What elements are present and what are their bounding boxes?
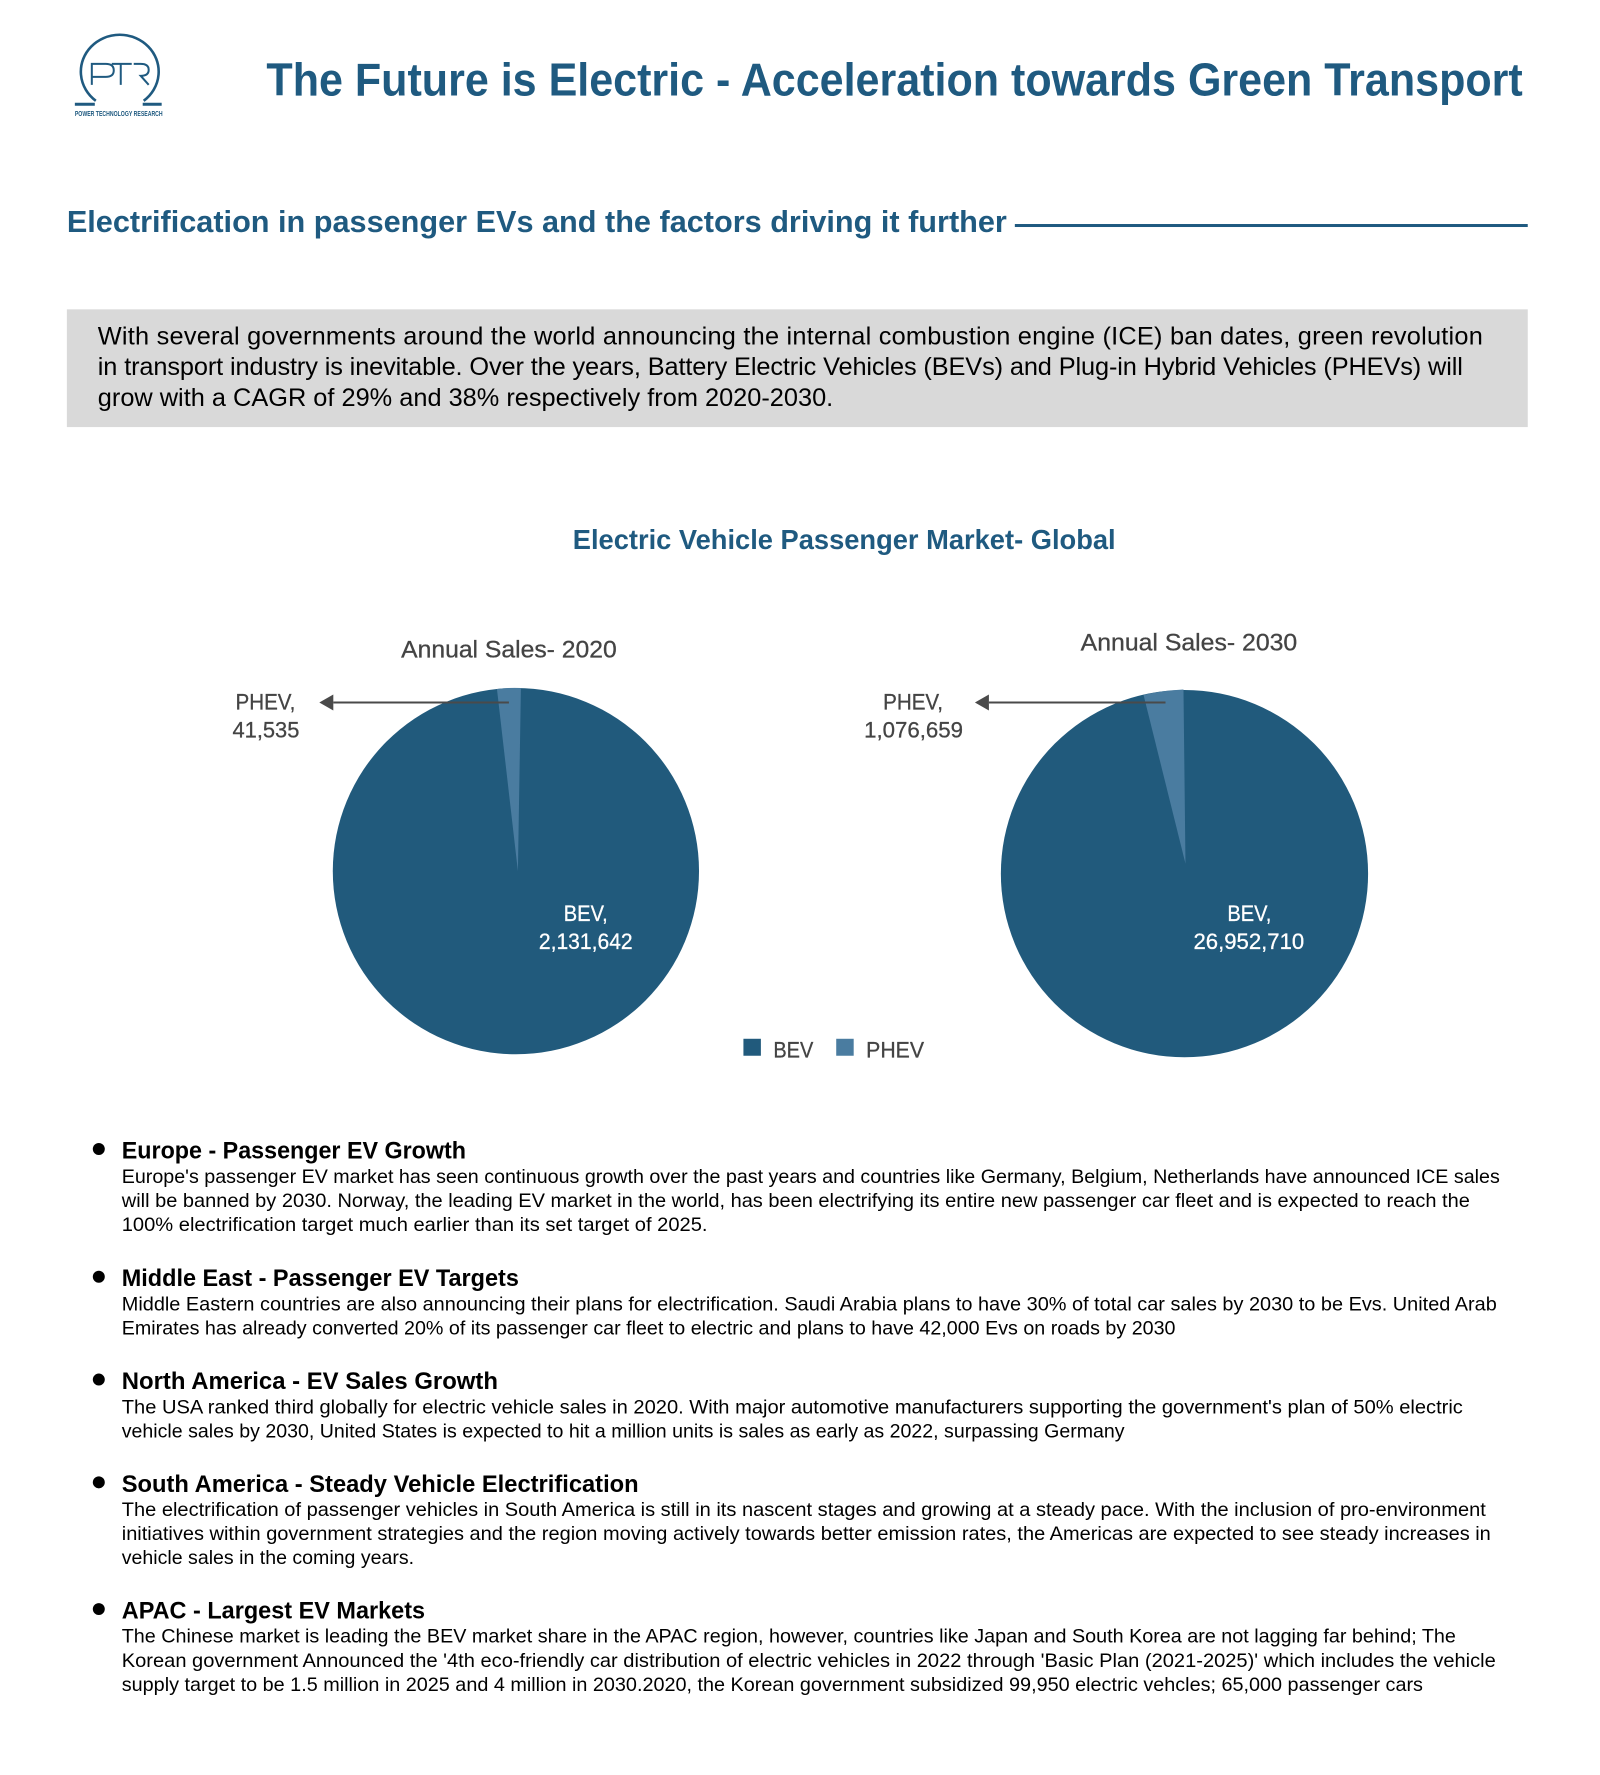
text block: Europe: Europe - Passenger EV Growth	[122, 1138, 466, 1165]
pie slice: BEV 2030	[1001, 690, 1368, 1057]
legend: BEV	[773, 1038, 813, 1063]
pie chart: annual sales 2030	[864, 630, 1368, 1057]
chart subtitle 2030: Annual Sales- 2030	[1081, 630, 1297, 657]
label: PHEV 2030: 1,076,659	[864, 717, 963, 742]
label: BEV 2020	[539, 901, 633, 954]
text block: North America: North America - EV Sales Growth	[122, 1368, 498, 1395]
legend: PHEV	[866, 1038, 924, 1063]
pie slice: PHEV 2030	[1144, 690, 1185, 864]
label: BEV 2030: 26,952,710	[1193, 929, 1304, 954]
title: The Future is Electric - Acceleration towards Green Transport	[266, 53, 1523, 105]
text block: APAC	[93, 1598, 1496, 1696]
text block: Middle East: Middle East - Passenger EV Targets	[122, 1265, 519, 1292]
label: PHEV 2020: PHEV,	[236, 689, 295, 714]
pie slice: PHEV 2020	[497, 688, 521, 871]
chart title: Electric Vehicle Passenger Market- Global	[573, 524, 1116, 555]
text block: APAC: APAC - Largest EV Markets	[122, 1598, 425, 1625]
label: BEV 2020: 2,131,642	[539, 929, 633, 954]
chart subtitle 2020: Annual Sales- 2020	[401, 637, 617, 664]
label: PHEV 2030: PHEV,	[883, 689, 943, 714]
heading: section subtitle with rule: Electrification in passenger EVs and the factors driving it further	[67, 204, 1007, 239]
text block: North America: The USA ranked third globally for electric vehicle sales in 2020. With major automotive manufacturers supporting the government's plan of 50% electric	[122, 1397, 1463, 1418]
text block: South America	[93, 1471, 1491, 1569]
text block: Europe	[93, 1138, 1500, 1236]
icon: PTR logo	[75, 35, 163, 118]
label: BEV 2020: BEV,	[564, 901, 608, 926]
text block: North America: vehicle sales by 2030, United States is expected to hit a million units is sales as early as 2022, surpassing Germany	[122, 1421, 1125, 1442]
text block: South America: The electrification of passenger vehicles in South America is still in its nascent stages and growing at a steady pace. With the inclusion of pro-environment	[122, 1500, 1487, 1521]
pie slice: BEV 2020	[333, 688, 699, 1054]
arrow: PHEV 2020 leader	[319, 695, 509, 710]
text block: North America	[93, 1368, 1463, 1442]
label: BEV 2030	[1193, 901, 1304, 954]
text block: South America: vehicle sales in the coming years.	[122, 1548, 414, 1569]
arrow: PHEV 2030 leader	[975, 695, 1166, 710]
pie chart: annual sales 2020	[233, 637, 699, 1054]
panel: intro text: grow with a CAGR of 29% and 38% respectively from 2020-2030.	[98, 384, 833, 412]
legend	[743, 1038, 924, 1063]
text block: APAC: The Chinese market is leading the BEV market share in the APAC region, however, countries like Japan and South Korea are not lagging far behind; The	[122, 1626, 1456, 1647]
label: PHEV 2020: 41,535	[233, 717, 299, 742]
panel: intro text: in transport industry is inevitable. Over the years, Battery Electric Vehicles (BEVs) and Plug-in Hybrid Vehicles (PHEVs) will	[98, 353, 1463, 381]
panel: intro text: With several governments around the world announcing the internal combustion engine (ICE) ban dates, green revolution	[98, 322, 1483, 350]
label: PHEV 2020	[233, 689, 299, 742]
text block: APAC: Korean government Announced the '4th eco-friendly car distribution of electric vehicles in 2022 through 'Basic Plan (2021-2025)' which includes the vehicle	[122, 1651, 1496, 1672]
label: PHEV 2030	[864, 689, 963, 742]
text block: Middle East	[93, 1265, 1497, 1340]
text block: Europe: 100% electrification target much earlier than its set target of 2025.	[122, 1215, 707, 1236]
text block: Europe: will be banned by 2030. Norway, the leading EV market in the world, has been electrifying its entire new passenger car fleet and is expected to reach the	[121, 1191, 1470, 1212]
panel: intro text	[67, 309, 1528, 427]
icon: PTR logo: POWER TECHNOLOGY RESEARCH	[75, 111, 163, 118]
text block: Middle East: Middle Eastern countries are also announcing their plans for electrification. Saudi Arabia plans to have 30% of total car sales by 2030 to be Evs. United Arab	[122, 1295, 1497, 1316]
text block: Middle East: Emirates has already converted 20% of its passenger car fleet to electric and plans to have 42,000 Evs on roads by 2030	[122, 1319, 1175, 1340]
text block: South America: South America - Steady Vehicle Electrification	[122, 1471, 639, 1498]
text block: Europe: Europe's passenger EV market has seen continuous growth over the past years and countries like Germany, Belgium, Netherlands have announced ICE sales	[122, 1167, 1500, 1188]
text block: South America: initiatives within government strategies and the region moving actively towards better emission rates, the Americas are expected to see steady increases in	[122, 1524, 1491, 1545]
text block: APAC: supply target to be 1.5 million in 2025 and 4 million in 2030.2020, the Korean government subsidized 99,950 electric vehcles; 65,000 passenger cars	[122, 1675, 1423, 1696]
label: BEV 2030: BEV,	[1227, 901, 1271, 926]
